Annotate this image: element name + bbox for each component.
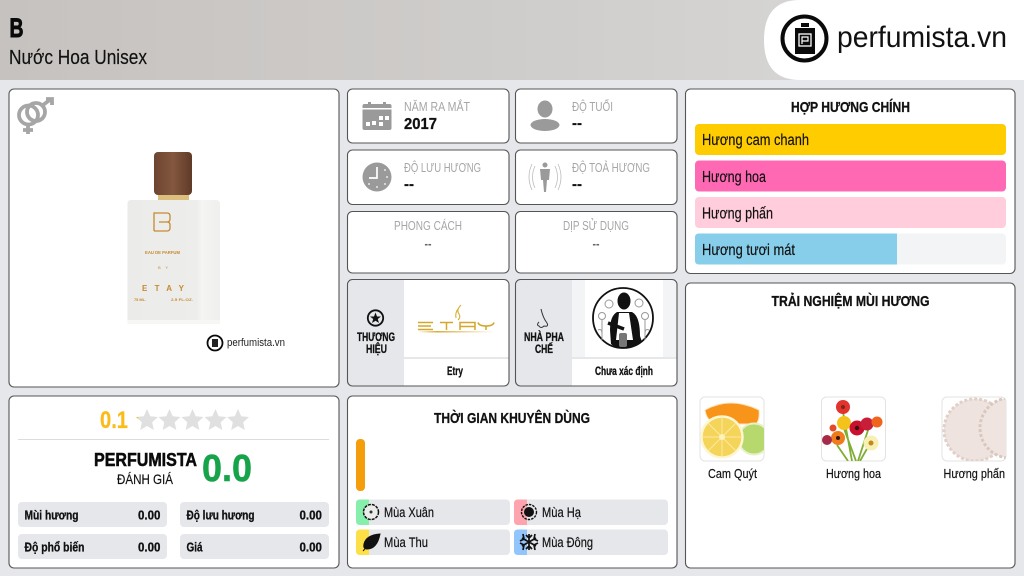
user rating value: 0.1	[100, 407, 128, 434]
scent: citrus	[700, 397, 770, 461]
watermark logo: perfumista.vn	[227, 337, 285, 349]
icon: unisex gender symbol	[19, 99, 52, 134]
orange time bar	[356, 439, 365, 491]
card: projection: --	[572, 176, 582, 192]
perfumer portrait	[593, 288, 653, 348]
season: autumn: Mùa Thu	[384, 535, 428, 550]
card: projection	[516, 150, 677, 204]
icon: person with waves	[529, 162, 561, 192]
icon: nose	[538, 309, 548, 328]
panel: scent experience	[686, 283, 1024, 568]
accord: citrus	[695, 124, 1006, 155]
Perfumista label: PERFUMISTA	[94, 449, 197, 470]
season: winter	[514, 530, 668, 555]
product bottle: EAU DE PARFUM	[145, 250, 180, 255]
product bottle: ETAY	[142, 284, 185, 293]
card: style	[348, 212, 509, 273]
card: perfumer: Chưa xác định	[595, 364, 653, 378]
heading: HỢP HƯƠNG CHÍNH	[791, 99, 910, 116]
stat: popularity	[18, 534, 167, 559]
card: release year: NĂM RA MẮT	[404, 99, 470, 114]
icon: star badge	[368, 310, 383, 326]
season: spring	[356, 500, 510, 525]
card: longevity: ĐỘ LƯU HƯƠNG	[404, 160, 481, 175]
scent: powder	[942, 396, 1006, 462]
accord: citrus: Hương cam chanh	[702, 132, 809, 149]
title: B	[10, 13, 24, 43]
product bottle: 75 ML.	[134, 297, 146, 302]
season: summer	[514, 500, 668, 525]
star rating	[136, 409, 249, 430]
label: Hương hoa	[826, 466, 882, 481]
card: projection: ĐỘ TOẢ HƯƠNG	[572, 160, 650, 175]
card: age: ĐỘ TUỔI	[572, 99, 613, 114]
card: perfumer	[516, 280, 677, 386]
accord: fresh: Hương tươi mát	[702, 242, 796, 259]
brand logo: Etry	[418, 305, 494, 332]
rating caption: ĐÁNH GIÁ	[117, 471, 174, 487]
icon: person	[530, 100, 560, 131]
card: occasion	[516, 212, 677, 273]
stat: price: Giá	[186, 540, 203, 554]
Perfumista score: 0.0	[202, 448, 252, 490]
accord: floral	[695, 160, 1006, 192]
card: brand: THƯƠNG	[357, 330, 395, 344]
panel: product image	[9, 89, 339, 387]
stat: longevity: 0.00	[300, 508, 322, 522]
stat: price: 0.00	[300, 540, 322, 554]
card: perfumer: CHẾ	[535, 341, 553, 356]
card: style: --	[424, 236, 432, 251]
panel: main accords	[686, 89, 1015, 274]
card: style: PHONG CÁCH	[394, 218, 462, 233]
stat: scent: Mùi hương	[24, 508, 78, 522]
panel: recommended season	[348, 396, 677, 568]
product bottle: BY	[158, 265, 168, 270]
label: Hương phấn	[944, 466, 1005, 481]
card: perfumer: NHÀ PHA	[524, 329, 564, 344]
stat: scent	[18, 502, 167, 527]
stat: longevity	[180, 502, 329, 527]
label: Cam Quýt	[708, 466, 757, 481]
card: longevity	[348, 150, 509, 204]
season: winter: Mùa Đông	[542, 535, 593, 550]
accord: fresh	[695, 234, 1006, 264]
card: brand	[348, 280, 509, 386]
accord: powdery	[695, 197, 1006, 228]
scent: floral	[822, 397, 886, 461]
season: spring: Mùa Xuân	[384, 505, 434, 520]
accord: powdery: Hương phấn	[702, 206, 773, 222]
card: brand: HIỆU	[366, 341, 387, 356]
stat: price	[180, 534, 329, 559]
card: age	[516, 89, 677, 143]
accord: floral: Hương hoa	[702, 169, 766, 186]
card: release year: 2017	[404, 116, 437, 133]
icon: calendar	[362, 102, 392, 130]
header bar	[0, 0, 1024, 80]
watermark logo	[208, 336, 285, 350]
heading: TRẢI NGHIỆM MÙI HƯƠNG	[772, 292, 930, 310]
card: age: --	[572, 115, 582, 131]
stat: longevity: Độ lưu hương	[186, 508, 254, 522]
card: brand: Etry	[447, 364, 463, 378]
season: summer: Mùa Hạ	[542, 505, 581, 520]
card: longevity: --	[404, 176, 414, 192]
panel: ratings	[9, 396, 339, 568]
stat: scent: 0.00	[138, 508, 161, 522]
brand logo: perfumista.vn	[837, 21, 1007, 54]
stat: popularity: 0.00	[138, 540, 161, 554]
card: occasion: DỊP SỬ DỤNG	[563, 218, 629, 233]
subtitle: Nước Hoa Unisex	[9, 47, 147, 69]
heading: THỜI GIAN KHUYÊN DÙNG	[434, 409, 590, 427]
card: release year	[348, 89, 509, 143]
product bottle: 2.5 FL.OZ.	[171, 297, 193, 302]
product bottle	[128, 152, 220, 324]
card: occasion: --	[592, 236, 600, 251]
brand logo	[764, 0, 1024, 80]
stat: popularity: Độ phổ biến	[24, 540, 84, 554]
icon: clock	[362, 162, 392, 192]
season: autumn	[356, 530, 510, 555]
